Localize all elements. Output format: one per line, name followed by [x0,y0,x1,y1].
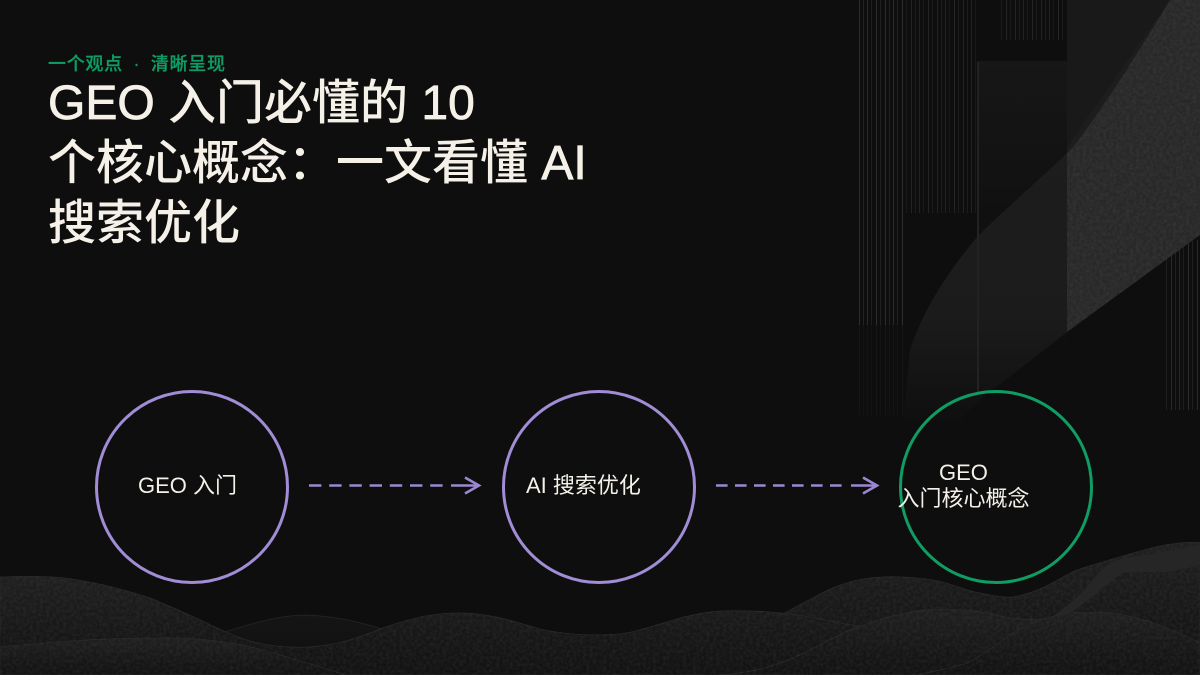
arrow 1 [309,478,479,494]
title [48,77,587,250]
right panels [857,0,1200,415]
circle: AI 搜索优化 [504,392,694,582]
right ribbon [903,0,1200,420]
eyebrow: 一个观点 · 清晰呈现 [48,54,226,74]
title: GEO 入门必懂的 10 [48,77,475,130]
label: GEO 入门核心概念: GEO [939,460,988,485]
bottom waves [0,542,1200,675]
label: GEO 入门核心概念: 入门核心概念 [898,486,1030,511]
label: GEO 入门: GEO 入门 [138,473,237,498]
right foreground wave [917,612,1200,675]
ribbon on waves [1053,545,1200,617]
circle: GEO 入门核心概念 [900,392,1092,582]
label: AI 搜索优化: AI 搜索优化 [526,473,641,498]
title: 搜索优化 [48,197,240,250]
title: 个核心概念：一文看懂 AI [48,137,587,190]
arrow 2 [716,478,877,494]
circle: GEO 入门 [96,392,288,582]
